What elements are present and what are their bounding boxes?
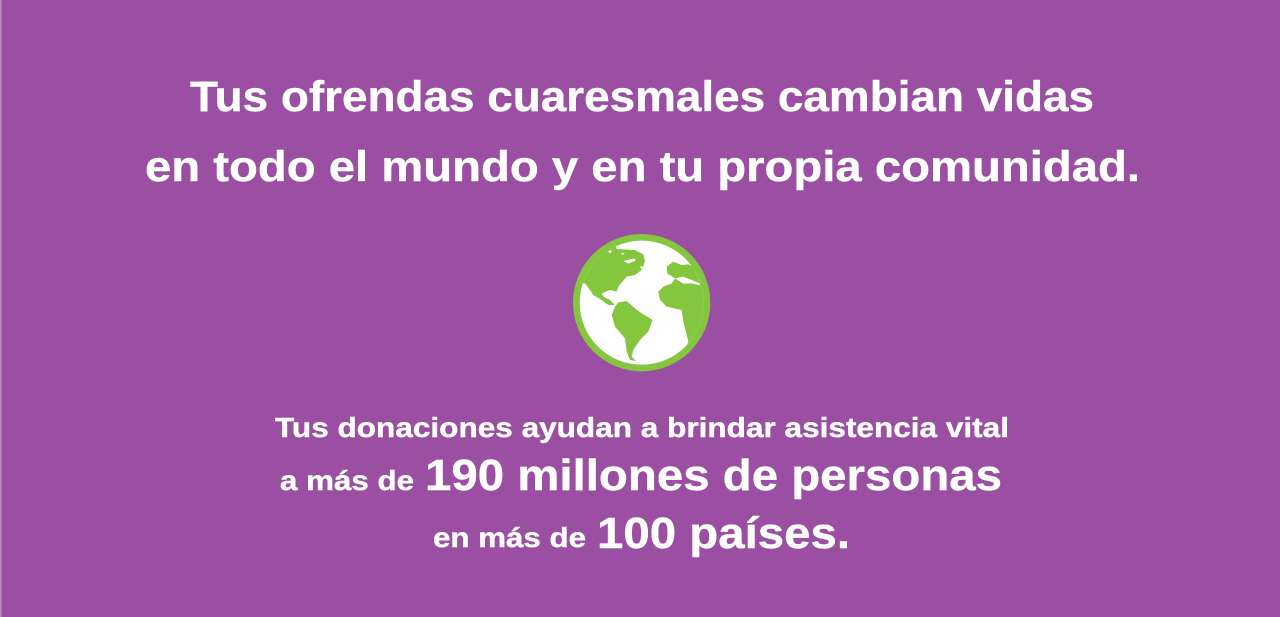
supporting text: 190 millones de personas: [425, 451, 1002, 500]
supporting text: [275, 412, 1009, 558]
title: [145, 73, 1140, 191]
supporting text: Tus donaciones ayudan a brindar asistencia vital: [275, 412, 1009, 443]
title: en todo el mundo y en tu propia comunidad.: [145, 143, 1140, 191]
supporting text: a más de: [280, 465, 414, 496]
supporting text: 100 países.: [597, 509, 850, 558]
icon: globe: [573, 234, 713, 371]
title: Tus ofrendas cuaresmales cambian vidas: [190, 73, 1094, 121]
supporting text: en más de: [433, 522, 586, 553]
